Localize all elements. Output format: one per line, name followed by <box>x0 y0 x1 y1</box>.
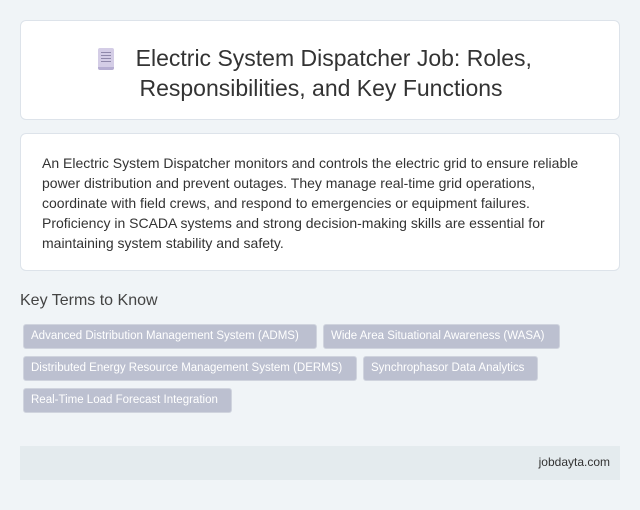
tag 3 <box>23 356 357 381</box>
title card <box>20 20 620 120</box>
description card <box>20 133 620 271</box>
description text: An Electric System Dispatcher monitors and controls the electric grid to ensure reliable power distribution and prevent outages. They manage real-time grid operations, coordinate with field crews, and respond to emergencies or equipment failures. Proficiency in SCADA systems and strong decision-making skills are essential for maintaining system stability and safety. <box>42 155 578 251</box>
tag 5: Real-Time Load Forecast Integration <box>31 394 218 406</box>
footer <box>20 446 620 480</box>
footer text: jobdayta.com <box>539 455 610 469</box>
tag 2: Wide Area Situational Awareness (WASA) <box>331 330 544 342</box>
title: Responsibilities, and Key Functions <box>139 75 503 101</box>
icon: document <box>98 48 114 70</box>
tag 2 <box>323 324 560 349</box>
heading: key terms: Key Terms to Know <box>20 292 158 309</box>
title <box>136 45 532 101</box>
tag 1: Advanced Distribution Management System (ADMS) <box>31 330 299 342</box>
title: Electric System Dispatcher Job: Roles, <box>136 45 532 71</box>
tag 3: Distributed Energy Resource Management System (DERMS) <box>31 362 342 374</box>
tag 4 <box>363 356 538 381</box>
tag 5 <box>23 388 232 413</box>
tag 1 <box>23 324 317 349</box>
tag 4: Synchrophasor Data Analytics <box>371 362 524 374</box>
